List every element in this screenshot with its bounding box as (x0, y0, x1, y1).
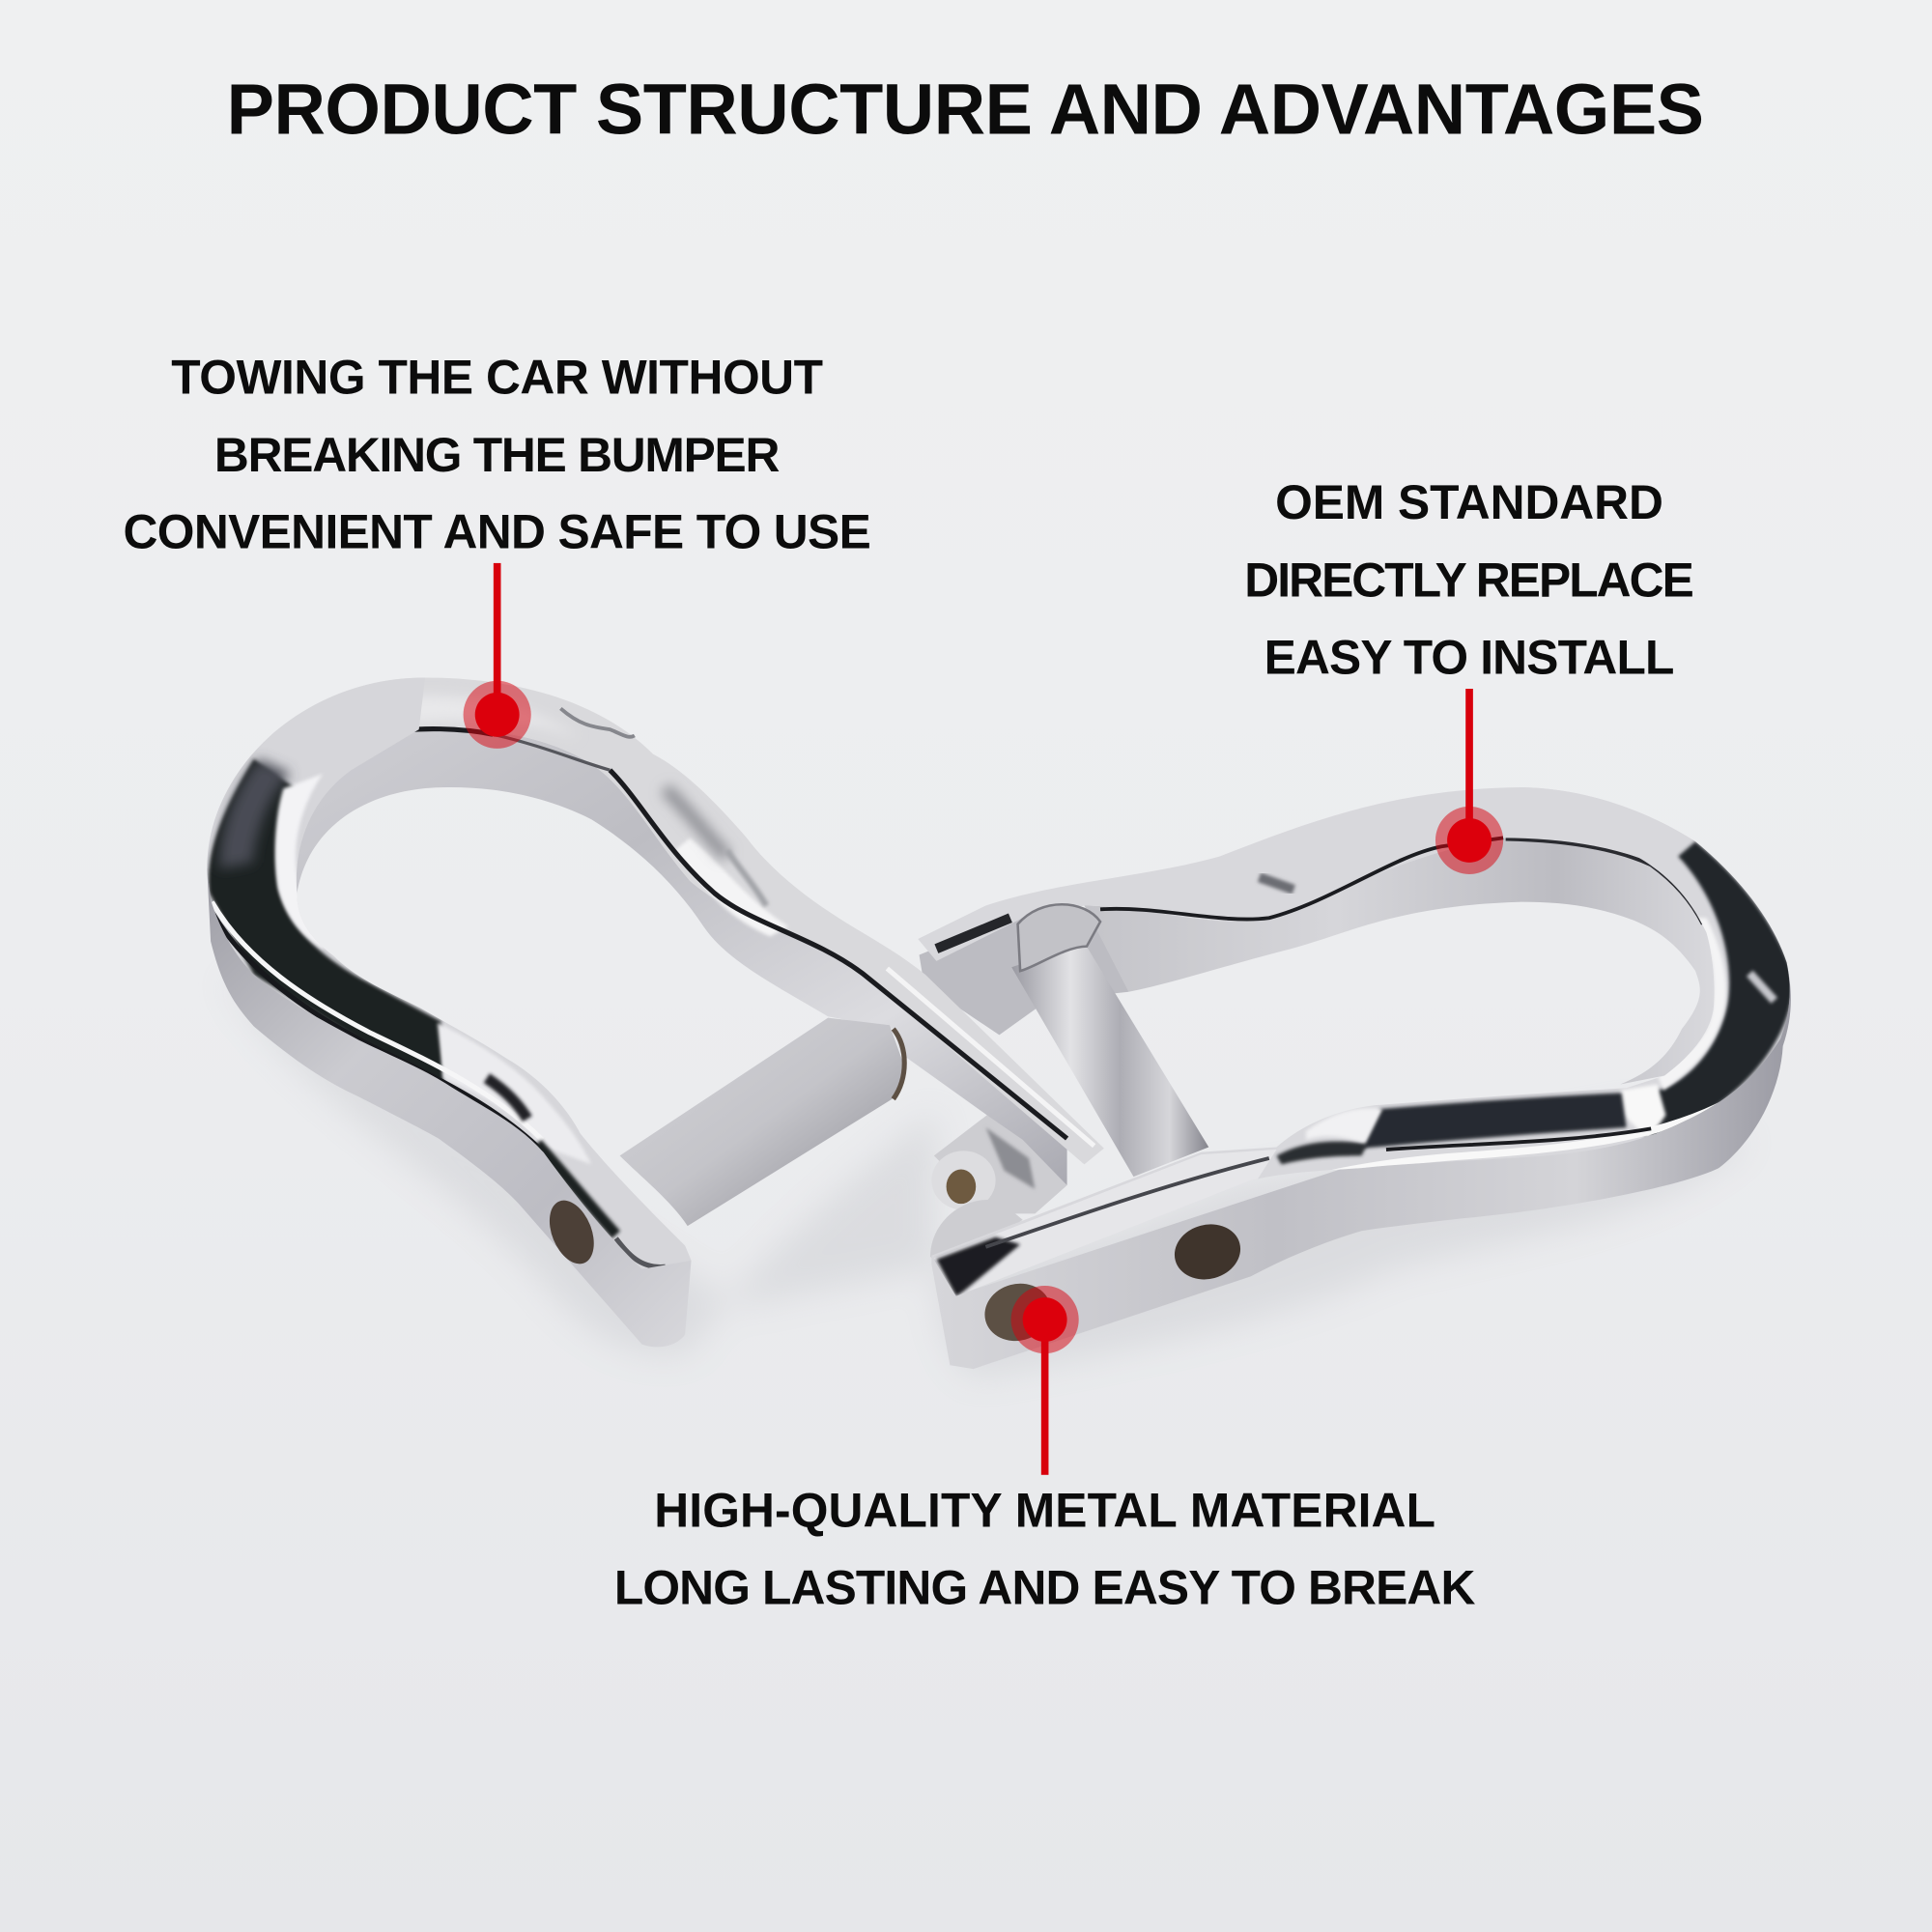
title: PRODUCT STRUCTURE AND ADVANTAGES (227, 69, 1704, 149)
callout text (1244, 475, 1694, 685)
right shackle lower holes (1168, 1217, 1247, 1287)
left shackle inner wall (286, 729, 1067, 1185)
callout line (1041, 1321, 1048, 1475)
bronze bore (947, 1169, 976, 1204)
left shackle shiny band (207, 678, 692, 1269)
callout text: CONVENIENT AND SAFE TO USE (124, 505, 871, 559)
left hole (541, 1194, 603, 1270)
callout text: DIRECTLY REPLACE (1244, 553, 1694, 607)
callout text (124, 351, 871, 559)
right shackle: upper part and pin (918, 787, 1715, 1177)
right shackle back plate (920, 912, 1128, 1035)
callout text: TOWING THE CAR WITHOUT (171, 351, 823, 405)
left pin (620, 1018, 906, 1226)
callout text: HIGH-QUALITY METAL MATERIAL (654, 1483, 1435, 1537)
left shackle (207, 678, 1104, 1347)
callout marker (1011, 1286, 1079, 1353)
right shackle dark edge line (1100, 838, 1503, 920)
callout text (614, 1483, 1476, 1615)
callout text: BREAKING THE BUMPER (214, 428, 780, 482)
left shackle arch top face (234, 678, 1104, 1164)
callout: material (614, 1286, 1476, 1615)
callout text: OEM STANDARD (1275, 475, 1663, 529)
callout marker (464, 681, 531, 749)
left shackle lower wall (207, 868, 692, 1347)
left shackle dark edge line (370, 729, 1067, 1139)
right shackle inner wall (1084, 838, 1715, 1084)
right shackle: lower part (931, 787, 1793, 1369)
right pin (1011, 943, 1208, 1177)
soft shadow (222, 974, 1749, 1378)
right shackle lower wall (931, 962, 1791, 1369)
callout: towing (124, 351, 871, 749)
right shackle top face (918, 787, 1695, 961)
collar and ring (930, 1115, 1067, 1269)
callout marker (1435, 807, 1503, 874)
callout text: LONG LASTING AND EASY TO BREAK (614, 1561, 1476, 1615)
callout: OEM (1244, 475, 1694, 874)
callout text: EASY TO INSTALL (1264, 631, 1674, 685)
callout line (494, 563, 500, 714)
right shackle shiny band (931, 787, 1790, 1296)
callout line (1465, 689, 1473, 839)
